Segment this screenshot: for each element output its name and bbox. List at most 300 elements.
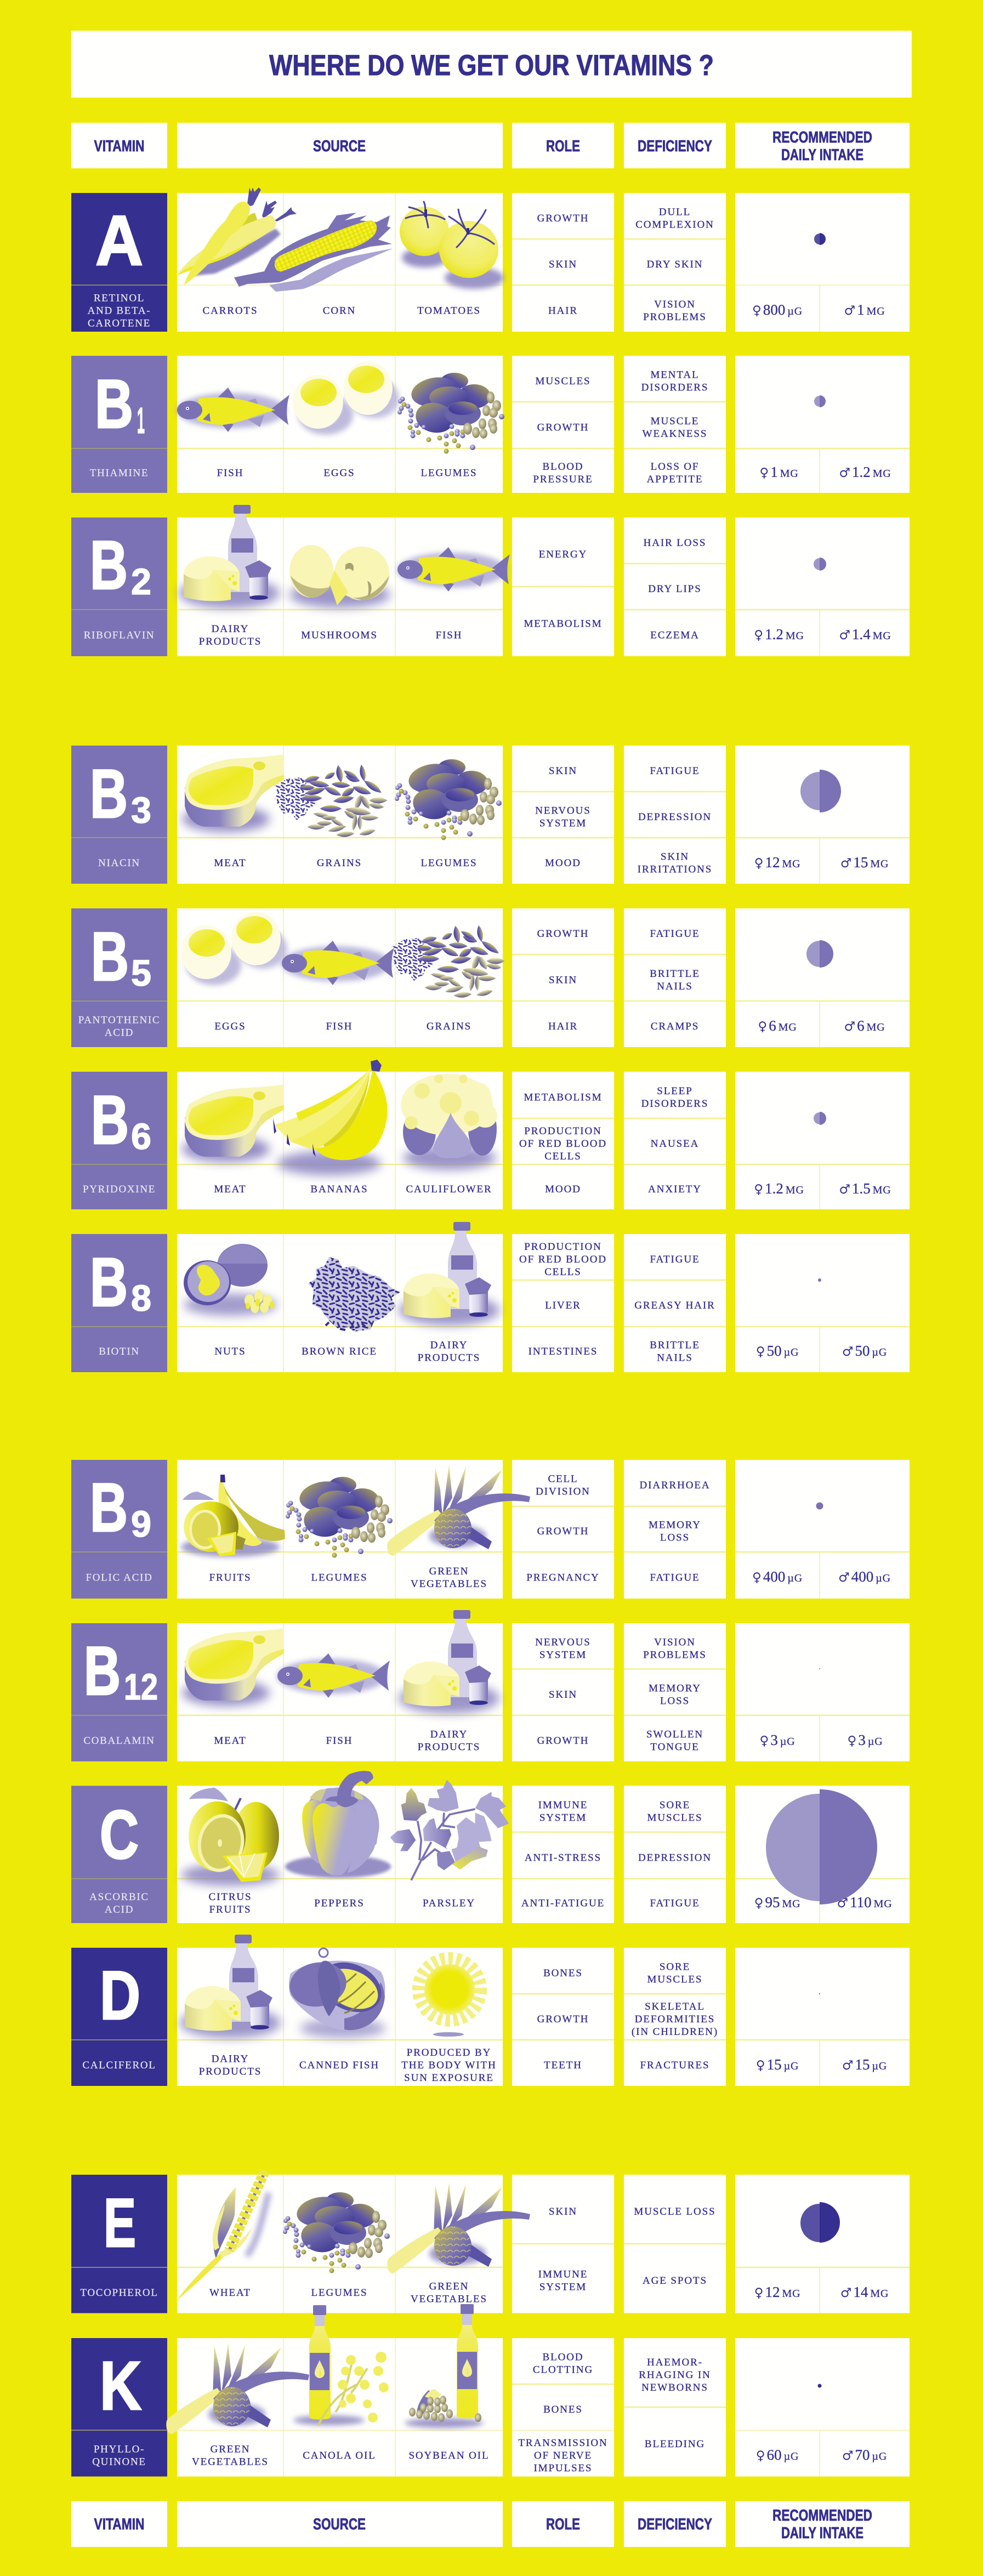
vitamin name: THIAMINE: [90, 467, 149, 479]
deficiencies: HAEMOR-: [647, 2357, 703, 2368]
vitamin name: ACID: [105, 1904, 134, 1915]
roles: CELL: [548, 1474, 578, 1485]
deficiencies: ANXIETY: [648, 1184, 702, 1195]
daily intake: ♀12MG: [754, 2284, 800, 2300]
deficiencies: [638, 1799, 712, 1909]
vitamin name: PANTOTHENIC: [78, 1014, 160, 1026]
source labels: NUTS: [214, 1346, 246, 1357]
source labels: CANOLA OIL: [303, 2450, 376, 2461]
deficiencies: MEMORY: [649, 1683, 701, 1694]
source labels: BANANAS: [310, 1184, 368, 1195]
daily intake: ♂15MG: [840, 854, 889, 871]
icon: wheat: [177, 2171, 269, 2301]
daily intake: ♀400µG: [752, 1568, 803, 1585]
deficiencies: ECZEMA: [650, 629, 700, 641]
source labels: [209, 1566, 487, 1590]
vitamin letter: B: [90, 527, 128, 604]
roles: DIVISION: [536, 1486, 590, 1498]
source labels: VEGETABLES: [192, 2456, 269, 2468]
daily intake: ♀60µG: [756, 2447, 799, 2463]
deficiencies: GREASY HAIR: [634, 1300, 715, 1311]
vitamin name: AND BETA-: [88, 305, 151, 317]
daily intake: ♂1.5MG: [839, 1180, 891, 1197]
daily intake: [760, 1732, 883, 1748]
source labels: CITRUS: [209, 1891, 252, 1903]
vitamin name: COBALAMIN: [83, 1735, 155, 1747]
deficiencies: BLEEDING: [645, 2438, 705, 2450]
source labels: PARSLEY: [423, 1898, 475, 1909]
daily intake: ♀12MG: [754, 854, 800, 871]
roles: [535, 765, 591, 869]
row: vitamin B6: [71, 1060, 910, 1209]
roles: [537, 928, 589, 1032]
deficiencies: [638, 765, 712, 875]
intake circle: [816, 1502, 823, 1510]
deficiencies: DEFORMITIES: [635, 2014, 715, 2025]
source labels: LEGUMES: [311, 2287, 368, 2299]
deficiencies: APPETITE: [647, 474, 703, 485]
daily intake: ♂1.2MG: [839, 464, 891, 480]
source labels: [199, 2047, 497, 2084]
deficiencies: [639, 1480, 711, 1583]
vitamin letter: 12: [124, 1667, 158, 1708]
roles: [537, 1967, 589, 2071]
intake circle: [800, 2202, 840, 2243]
deficiencies: CRAMPS: [651, 1021, 699, 1032]
row: vitamin E: [71, 2171, 910, 2313]
vitamin name: [78, 1014, 160, 1038]
daily intake: ♀15µG: [756, 2056, 799, 2073]
roles: IMMUNE: [538, 2268, 588, 2281]
roles: ANTI-STRESS: [525, 1852, 601, 1864]
deficiencies: DISORDERS: [641, 382, 708, 394]
deficiencies: HAIR LOSS: [644, 537, 706, 549]
daily intake: [754, 1180, 891, 1197]
daily intake: ♀1.2MG: [754, 626, 804, 642]
source labels: LEGUMES: [421, 857, 478, 869]
daily intake: ♀50µG: [756, 1343, 799, 1359]
intake circle: [819, 1668, 820, 1669]
vitamin letter: 5: [131, 953, 151, 994]
roles: [538, 2206, 588, 2293]
icon: grains: [391, 925, 505, 998]
roles: SKIN: [549, 2206, 577, 2217]
icon: grains: [274, 764, 388, 838]
roles: CELLS: [544, 1266, 582, 1278]
daily intake: ♀3µG: [848, 1732, 883, 1748]
source labels: [214, 857, 478, 869]
row: vitamin B3: [71, 746, 910, 884]
source labels: GREEN: [211, 2444, 250, 2455]
daily intake: [754, 1894, 892, 1910]
icon: dairy products: [399, 1222, 499, 1326]
vitamin letter: B: [90, 756, 128, 832]
deficiencies: FATIGUE: [650, 1898, 700, 1909]
roles: [535, 1637, 591, 1747]
daily intake: ♀3µG: [760, 1732, 795, 1748]
icon: meat: [182, 1628, 284, 1706]
source labels: BROWN RICE: [302, 1346, 377, 1357]
source labels: MEAT: [214, 1735, 247, 1747]
roles: GROWTH: [537, 1735, 589, 1747]
source labels: DAIRY: [212, 2054, 249, 2065]
deficiencies: FATIGUE: [650, 928, 700, 940]
source labels: DAIRY: [430, 1340, 468, 1351]
roles: SKIN: [549, 259, 577, 270]
source labels: [192, 2444, 490, 2468]
roles: OF NERVE: [534, 2450, 592, 2461]
source labels: LEGUMES: [421, 467, 478, 479]
deficiencies: SORE: [660, 1961, 690, 1972]
source labels: [209, 2281, 487, 2305]
deficiencies: [635, 206, 714, 323]
vitamin letter: 8: [131, 1278, 151, 1319]
daily intake: [758, 1017, 885, 1034]
icon: peppers: [285, 1771, 391, 1878]
source labels: [209, 1891, 475, 1915]
source labels: [214, 1340, 480, 1364]
deficiencies: SWOLLEN: [646, 1729, 703, 1740]
intake circle: [814, 1112, 826, 1125]
vitamin letter: 3: [131, 790, 151, 831]
footer header row: DAILY INTAKE: [781, 2524, 863, 2542]
deficiencies: DEPRESSION: [638, 1852, 712, 1864]
daily intake: ♂110MG: [837, 1894, 892, 1910]
daily intake: ♂15µG: [842, 2056, 887, 2073]
daily intake: ♂14MG: [840, 2284, 889, 2300]
deficiencies: DISORDERS: [641, 1098, 708, 1110]
deficiencies: FRACTURES: [640, 2060, 709, 2071]
source labels: CARROTS: [203, 305, 258, 317]
deficiencies: DRY SKIN: [647, 259, 703, 270]
source labels: GREEN: [429, 2281, 469, 2293]
intake circle: [806, 940, 833, 968]
deficiencies: MENTAL: [650, 369, 700, 380]
source labels: GRAINS: [427, 1021, 471, 1032]
row: vitamin B8: [71, 1222, 910, 1372]
source labels: PEPPERS: [314, 1898, 365, 1909]
roles: [521, 1799, 605, 1909]
icon: fish: [281, 941, 394, 985]
vitamin name: CAROTENE: [88, 318, 151, 329]
header row: [71, 123, 910, 168]
roles: BLOOD: [543, 461, 583, 473]
daily intake: ♀6MG: [758, 1017, 797, 1034]
source labels: [214, 1729, 480, 1753]
source labels: FRUITS: [209, 1572, 251, 1583]
row: vitamin D: [71, 1935, 910, 2086]
deficiencies: SKIN: [661, 851, 689, 863]
deficiencies: DIARRHOEA: [639, 1480, 711, 1491]
roles: MUSCLES: [536, 376, 590, 387]
roles: SKIN: [549, 975, 577, 986]
footer header row: DEFICIENCY: [638, 2516, 712, 2533]
footer header row: VITAMIN: [94, 2516, 145, 2533]
icon: green vegetables: [166, 2343, 309, 2434]
footer header row: ROLE: [546, 2516, 580, 2533]
roles: GROWTH: [537, 928, 589, 940]
icon: tomatoes: [400, 202, 504, 289]
source labels: GREEN: [429, 1566, 469, 1577]
deficiencies: LOSS: [660, 1532, 690, 1544]
icon: legumes: [397, 373, 504, 454]
roles: [537, 213, 589, 317]
source labels: EGGS: [214, 1021, 246, 1032]
icon: nuts: [184, 1244, 277, 1316]
roles: NERVOUS: [535, 1637, 591, 1648]
source labels: PRODUCED BY: [407, 2047, 491, 2058]
source labels: GRAINS: [317, 857, 362, 869]
vitamin letter: B: [90, 1470, 128, 1546]
source labels: PRODUCTS: [199, 2066, 262, 2078]
icon: soybean oil: [405, 2304, 484, 2428]
deficiencies: PROBLEMS: [643, 311, 707, 323]
vitamin letter: B: [91, 1082, 129, 1158]
icon: mushrooms: [289, 545, 390, 608]
deficiencies: [644, 537, 706, 641]
daily intake: ♀800µG: [752, 302, 803, 318]
vitamin name: FOLIC ACID: [86, 1572, 153, 1583]
source labels: SOYBEAN OIL: [408, 2450, 490, 2461]
deficiencies: VISION: [654, 1637, 696, 1648]
vitamin name: RETINOL: [94, 293, 145, 304]
deficiencies: BRITTLE: [650, 1340, 700, 1351]
deficiencies: MUSCLES: [647, 1974, 702, 1986]
vitamin name: CALCIFEROL: [82, 2060, 156, 2071]
vitamin name: ACID: [105, 1027, 134, 1038]
deficiencies: TONGUE: [650, 1741, 700, 1753]
intake circle: [818, 1278, 821, 1282]
icon: meat: [182, 754, 284, 832]
roles: CLOTTING: [533, 2364, 593, 2376]
deficiencies: SKELETAL: [645, 2001, 705, 2012]
roles: SYSTEM: [539, 818, 587, 829]
intake circle: [814, 233, 826, 245]
source labels: THE BODY WITH: [401, 2060, 497, 2071]
deficiencies: MUSCLE: [651, 416, 699, 427]
deficiencies: MUSCLE LOSS: [634, 2206, 716, 2217]
deficiencies: DEPRESSION: [638, 811, 712, 823]
intake circle: [766, 1789, 877, 1904]
row: vitamin B1: [71, 356, 910, 493]
icon: carrots: [177, 187, 297, 285]
source labels: [214, 1021, 471, 1032]
roles: [519, 1241, 607, 1357]
roles: METABOLISM: [524, 618, 603, 629]
roles: SYSTEM: [539, 1649, 587, 1661]
deficiencies: LOSS: [660, 1695, 690, 1707]
source labels: DAIRY: [212, 623, 249, 635]
deficiencies: [639, 2357, 711, 2450]
deficiencies: WEAKNESS: [643, 428, 707, 440]
intake circle: [800, 770, 841, 812]
vitamin letter: B: [90, 1244, 128, 1321]
source labels: FRUITS: [209, 1904, 251, 1915]
source labels: DAIRY: [430, 1729, 468, 1740]
header row: SOURCE: [313, 138, 366, 155]
roles: HAIR: [548, 305, 578, 317]
roles: GROWTH: [537, 213, 589, 224]
deficiencies: (IN CHILDREN): [632, 2026, 718, 2038]
vitamin name: NIACIN: [98, 857, 140, 869]
roles: BONES: [543, 1967, 583, 1979]
vitamin letter: K: [100, 2348, 141, 2424]
row: vitamin B12: [71, 1610, 910, 1761]
deficiencies: [634, 1254, 715, 1364]
header row: DEFICIENCY: [638, 138, 712, 155]
source labels: WHEAT: [209, 2287, 251, 2299]
deficiencies: [650, 928, 700, 1032]
roles: TEETH: [544, 2060, 582, 2071]
icon: canned fish: [286, 1948, 389, 2038]
vitamin name: TOCOPHEROL: [80, 2287, 158, 2299]
footer header row: SOURCE: [313, 2516, 366, 2533]
vitamin name: PHYLLO-: [94, 2444, 145, 2455]
roles: ENERGY: [539, 549, 587, 560]
deficiencies: [641, 1085, 708, 1195]
deficiencies: FATIGUE: [650, 765, 700, 777]
icon: eggs: [293, 361, 399, 435]
deficiencies: NAILS: [657, 1352, 693, 1364]
roles: [518, 2352, 608, 2474]
vitamin name: ASCORBIC: [89, 1891, 149, 1903]
vitamin letter: C: [100, 1797, 139, 1873]
deficiencies: COMPLEXION: [635, 219, 714, 230]
deficiencies: [634, 2206, 716, 2287]
daily intake: [754, 626, 891, 642]
source labels: EGGS: [323, 467, 355, 479]
deficiencies: AGE SPOTS: [643, 2275, 707, 2287]
daily intake: [759, 464, 891, 480]
icon: canola oil: [293, 2305, 389, 2426]
icon: corn: [234, 213, 393, 292]
roles: OF RED BLOOD: [519, 1254, 607, 1265]
icon: fish: [177, 388, 289, 432]
daily intake: ♂70µG: [842, 2447, 887, 2463]
source labels: FISH: [436, 629, 462, 641]
intake circle: [814, 558, 826, 571]
intake circle: [818, 2384, 821, 2388]
icon: fish: [277, 1653, 390, 1698]
vitamin name: [92, 2444, 146, 2468]
roles: MOOD: [545, 857, 581, 869]
vitamin letter: D: [100, 1958, 140, 2034]
icon: green vegetables: [387, 1465, 530, 1556]
vitamin letter: 6: [131, 1116, 151, 1157]
deficiencies: LOSS OF: [651, 461, 699, 473]
daily intake: ♂1MG: [844, 302, 885, 318]
icon: fish: [397, 547, 510, 592]
roles: BONES: [543, 2404, 583, 2415]
icon: meat: [182, 1084, 284, 1162]
source labels: MEAT: [214, 857, 247, 869]
vitamin name: BIOTIN: [99, 1346, 140, 1357]
roles: IMMUNE: [538, 1799, 588, 1811]
deficiencies: NAILS: [657, 981, 693, 992]
row: vitamin A: [71, 187, 910, 332]
daily intake: [752, 1568, 891, 1585]
footer header row: RECOMMENDED: [772, 2507, 872, 2524]
roles: BLOOD: [543, 2352, 583, 2363]
header row: VITAMIN: [94, 138, 145, 155]
deficiencies: FATIGUE: [650, 1572, 700, 1583]
icon: legumes: [286, 1477, 393, 1558]
roles: SKIN: [549, 765, 577, 777]
roles: LIVER: [545, 1300, 581, 1311]
daily intake: [756, 2447, 887, 2463]
deficiencies: DULL: [659, 206, 691, 218]
deficiencies: [632, 1961, 718, 2071]
daily intake: ♂6MG: [844, 1017, 885, 1034]
deficiencies: SORE: [660, 1799, 690, 1811]
deficiencies: SLEEP: [657, 1085, 693, 1097]
row: vitamin B9: [71, 1460, 910, 1599]
source labels: FISH: [217, 467, 243, 479]
vitamin name: PYRIDOXINE: [83, 1184, 156, 1195]
source labels: LEGUMES: [311, 1572, 368, 1583]
daily intake: ♂1.4MG: [839, 626, 891, 642]
roles: NERVOUS: [535, 805, 591, 817]
title: WHERE DO WE GET OUR VITAMINS ?: [269, 49, 714, 82]
vitamin name: QUINONE: [92, 2456, 146, 2468]
roles: SYSTEM: [539, 2282, 587, 2293]
deficiencies: BRITTLE: [650, 968, 700, 980]
roles: PRODUCTION: [524, 1241, 602, 1253]
daily intake: ♂400µG: [838, 1568, 891, 1585]
source labels: CAULIFLOWER: [406, 1184, 492, 1195]
row: vitamin B5: [71, 908, 910, 1047]
deficiencies: MEMORY: [649, 1520, 701, 1531]
deficiencies: PROBLEMS: [643, 1649, 707, 1661]
source labels: [217, 467, 478, 479]
roles: GROWTH: [537, 422, 589, 433]
vitamin letter: B: [91, 919, 129, 995]
source labels: SUN EXPOSURE: [404, 2072, 494, 2084]
source labels: [214, 1184, 492, 1195]
roles: GROWTH: [537, 1526, 589, 1537]
source labels: FISH: [326, 1735, 353, 1747]
roles: GROWTH: [537, 2014, 589, 2025]
row: vitamin B1: 1: [137, 400, 145, 441]
icon: sun: [420, 1960, 479, 2037]
vitamin name: RIBOFLAVIN: [84, 629, 155, 641]
roles: ANTI-FATIGUE: [521, 1898, 605, 1909]
icon: dairy products: [180, 1935, 281, 2038]
roles: PRESSURE: [533, 474, 593, 485]
source labels: CORN: [323, 305, 356, 317]
vitamin name: [89, 1891, 149, 1915]
roles: PREGNANCY: [526, 1572, 600, 1583]
roles: [526, 1474, 600, 1583]
daily intake: ♂50µG: [842, 1343, 887, 1359]
footer header row: [71, 2501, 910, 2547]
source labels: MEAT: [214, 1184, 247, 1195]
icon: citrus fruits: [181, 1788, 280, 1886]
source labels: VEGETABLES: [411, 2294, 487, 2305]
source labels: TOMATOES: [417, 305, 481, 317]
daily intake: ♀1.2MG: [754, 1180, 804, 1197]
row: vitamin B2: [71, 505, 910, 656]
roles: TRANSMISSION: [518, 2437, 608, 2449]
source labels: [199, 623, 462, 647]
roles: IMPULSES: [533, 2463, 593, 2474]
daily intake: [754, 2284, 889, 2300]
deficiencies: [641, 369, 708, 485]
header row: RECOMMENDED: [772, 129, 872, 146]
deficiencies: VISION: [654, 299, 696, 310]
daily intake: [754, 854, 889, 871]
daily intake: ♀1MG: [759, 464, 799, 480]
